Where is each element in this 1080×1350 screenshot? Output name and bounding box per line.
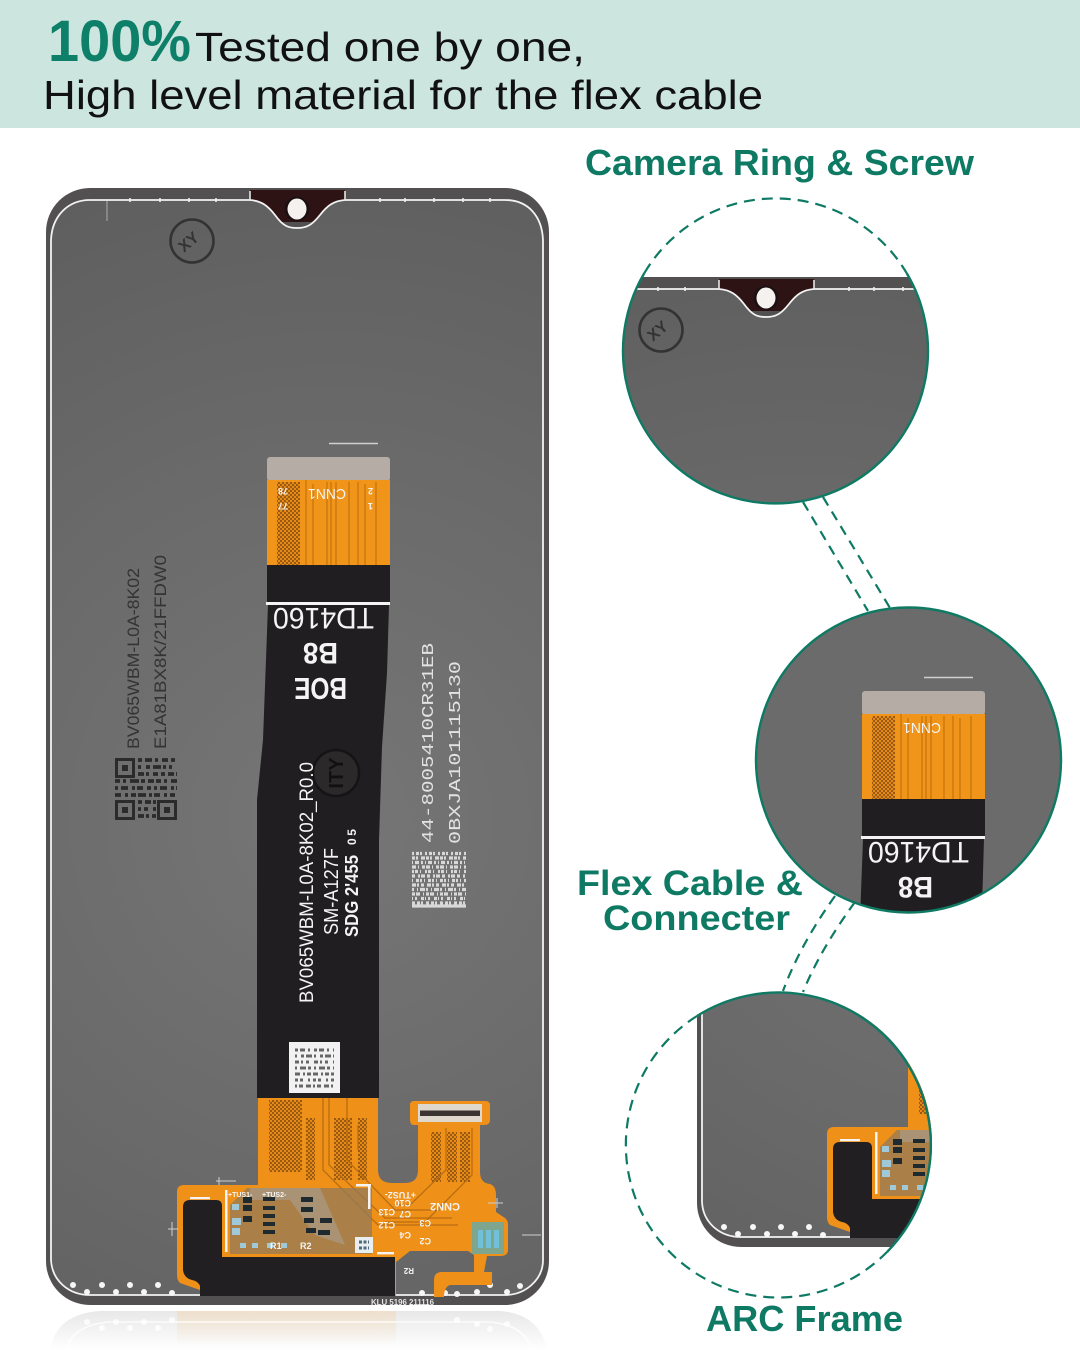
flex bottom silk text: R1 xyxy=(270,1241,282,1251)
silk: serial line 2: 0BXJA101115130 xyxy=(447,661,466,844)
tab label: CNN1 xyxy=(903,719,941,736)
flex silk: SM-A127F: SM-A127F xyxy=(321,848,343,935)
flex silk: BOE: BOE xyxy=(294,671,347,706)
stamp on screen: XY xyxy=(175,229,203,256)
tab labels: 78 xyxy=(278,486,288,496)
panel: phone LCD back xyxy=(46,188,549,1307)
headline: tested one by one: Tested one by one, xyxy=(195,24,585,70)
flex silk: TD4160: TD4160 xyxy=(273,601,374,634)
silk: panel id line 2: E1A81BX8K/21FFDW0 xyxy=(151,555,170,749)
headline: 100%: 100% xyxy=(48,9,191,74)
flex bottom silk text: +TUS1- xyxy=(228,1192,253,1199)
flex stamp: ITY xyxy=(326,757,348,789)
flex stamp xyxy=(313,750,359,796)
flex bottom silk text: C13 xyxy=(378,1207,395,1217)
flex cable upper section xyxy=(257,444,390,900)
B8: B8 xyxy=(898,870,933,903)
silk: serial line 1: 44-8005410CR31EB xyxy=(420,643,439,843)
alignment cross marks xyxy=(168,1177,541,1236)
white barcode label xyxy=(289,1042,340,1093)
tab labels xyxy=(278,485,373,511)
tab labels: 1 xyxy=(368,501,373,511)
flex silk: SDG code: SDG 2'455 xyxy=(342,855,362,937)
flex bottom silk text: C10 xyxy=(394,1198,411,1208)
circle outline dashed xyxy=(626,1016,887,1297)
flex bottom silk text: C2 xyxy=(419,1236,431,1246)
circle outline solid xyxy=(697,992,931,1252)
reflection under phone xyxy=(50,1311,547,1350)
QR code xyxy=(115,760,177,818)
label: ARC frame: ARC Frame xyxy=(706,1298,903,1339)
tab labels: CNN1 xyxy=(308,485,346,502)
dashed connector: flex to frame xyxy=(783,896,855,992)
label: flex cable and connecter: Connecter xyxy=(603,899,790,938)
silk: panel id line 1: BV065WBM-L0A-8K02 xyxy=(124,568,143,749)
TD4160: TD4160 xyxy=(868,835,969,868)
stamp: XY xyxy=(644,318,672,345)
circle outline solid xyxy=(623,273,928,503)
data matrix code xyxy=(412,854,466,906)
flex silk: B8: B8 xyxy=(303,636,338,669)
zoom circle: flex cable xyxy=(754,606,1062,914)
circle outline dashed xyxy=(644,198,907,273)
circle outline xyxy=(756,608,1061,912)
header banner xyxy=(0,0,1080,128)
flex bottom silk text: C4 xyxy=(399,1230,411,1240)
flex silk: 05: 05 xyxy=(345,829,359,845)
headline: high level material: High level material for the flex cable xyxy=(43,72,763,118)
flex bottom silk text: C12 xyxy=(378,1220,395,1230)
teal component xyxy=(472,1222,504,1254)
flex bottom silk text xyxy=(228,1190,460,1275)
label: flex cable and connecter: Flex Cable & xyxy=(577,864,803,903)
flex bottom silk text: R2 xyxy=(300,1241,312,1251)
dashed connector: camera to flex xyxy=(803,497,890,611)
zoom circle: ARC frame xyxy=(624,991,932,1299)
flex silk: model: BV065WBM-L0A-8K02_R0.0 xyxy=(297,762,318,1003)
flex cable body xyxy=(257,880,379,1098)
label: camera ring and screw: Camera Ring & Screw xyxy=(585,142,975,183)
flex bottom silk text: +TUS2- xyxy=(385,1190,416,1200)
flex bottom silk text: +TUS2- xyxy=(262,1192,287,1199)
flex bottom silk text: R2 xyxy=(403,1266,414,1275)
flex bottom silk text: C3 xyxy=(419,1218,431,1228)
bottom edge date code: KLU 5196 211116 xyxy=(371,1297,434,1307)
flex bottom silk text: CNN2 xyxy=(430,1200,460,1212)
label: flex cable and connecter xyxy=(577,864,803,938)
zoom circle: camera ring xyxy=(622,197,930,505)
flex cable lower section xyxy=(177,1098,508,1297)
flex bottom silk text: C7 xyxy=(399,1209,411,1219)
tab labels: 77 xyxy=(278,501,288,511)
tab labels: 2 xyxy=(368,486,373,496)
